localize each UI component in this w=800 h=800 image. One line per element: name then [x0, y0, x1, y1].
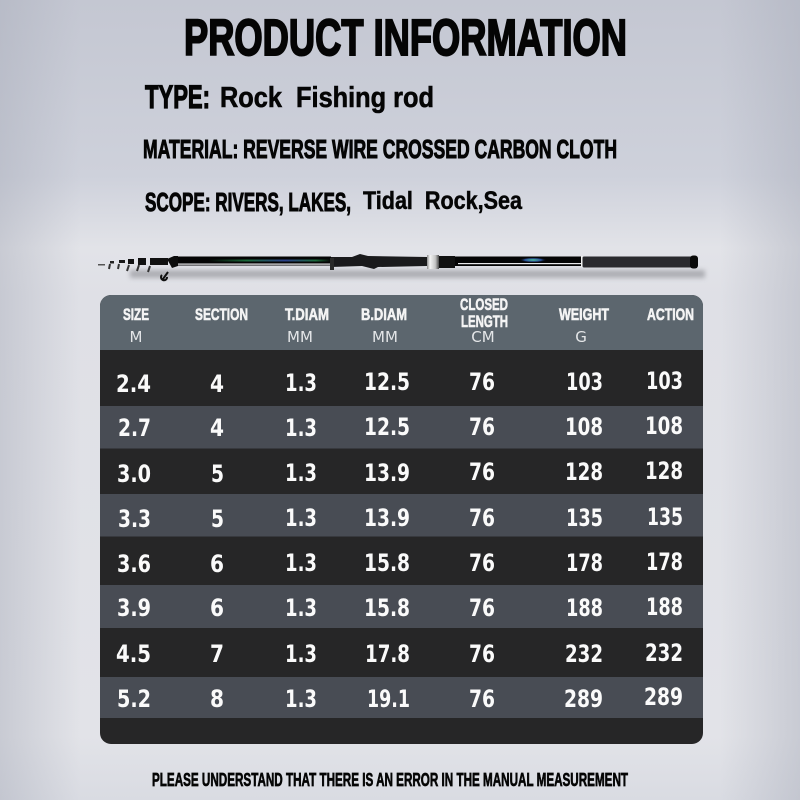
table header band [100, 295, 703, 350]
row 3.9: 76 [469, 594, 495, 622]
row 3.6 [117, 548, 683, 578]
row 2.4: 76 [469, 368, 495, 396]
row 3.3: 13.9 [364, 504, 410, 532]
column units: M [130, 328, 142, 346]
row 3.9: 188 [646, 593, 683, 621]
row 3.3: 5 [211, 505, 224, 533]
row 4.5: 7 [210, 640, 224, 668]
title: PRODUCT INFORMATION [184, 9, 627, 66]
table row bands [100, 406, 703, 718]
row 4.5: 17.8 [365, 640, 410, 668]
row 3.0: 76 [469, 458, 495, 486]
row 3.3 [118, 503, 683, 533]
row 3.0 [117, 457, 683, 488]
column units: MM [372, 328, 398, 346]
row 4.5: 232 [645, 639, 683, 667]
row 3.0: 128 [645, 457, 683, 485]
scope: Tidal Rock,Sea [363, 187, 523, 215]
column headings: T.DIAM [285, 305, 329, 324]
column headings: SECTION [195, 305, 248, 324]
row 3.6: 178 [646, 548, 683, 576]
scope: SCOPE: RIVERS, LAKES, [145, 187, 351, 217]
row 3.6: 178 [566, 549, 603, 577]
row 3.3: 135 [566, 504, 603, 532]
row 3.6: 6 [210, 550, 224, 578]
row 3.3: 76 [469, 504, 495, 532]
row 3.0: 128 [565, 458, 603, 486]
row 4.5 [116, 639, 683, 668]
row 2.4 [116, 367, 683, 398]
row 2.7: 4 [210, 414, 224, 442]
specification table panel [100, 295, 703, 744]
row 3.0: 5 [211, 460, 224, 488]
row 2.4: 2.4 [116, 370, 151, 398]
column headings: SIZE [123, 305, 149, 324]
row 5.2: 5.2 [117, 685, 151, 713]
column headings: LENGTH [461, 312, 508, 331]
column units: G [575, 328, 587, 346]
row 5.2: 289 [564, 685, 603, 713]
row 4.5: 4.5 [116, 640, 151, 668]
row 5.2: 76 [469, 685, 495, 713]
row 3.6: 1.3 [285, 549, 317, 577]
row 2.4: 12.5 [364, 368, 410, 396]
product type: TYPE: [145, 79, 210, 115]
row 3.6: 76 [469, 549, 495, 577]
row 3.3: 1.3 [285, 504, 317, 532]
row 2.7: 1.3 [285, 414, 317, 442]
column units: MM [287, 328, 313, 346]
row 3.9: 188 [566, 594, 603, 622]
column headings: B.DIAM [361, 305, 407, 324]
column units [130, 328, 587, 346]
row 2.4: 1.3 [285, 369, 317, 397]
row 2.7: 76 [469, 413, 495, 441]
product type [145, 79, 434, 115]
row 2.7: 108 [645, 412, 683, 440]
row 3.9 [117, 593, 683, 622]
row 3.9: 3.9 [117, 594, 151, 622]
row 4.5: 76 [469, 640, 495, 668]
row 5.2: 289 [644, 683, 683, 711]
column headings: ACTION [647, 305, 694, 324]
row 3.0: 1.3 [285, 459, 317, 487]
row 5.2: 1.3 [285, 685, 317, 713]
row 3.3: 3.3 [118, 505, 151, 533]
row 5.2: 8 [210, 685, 224, 713]
row 2.7 [118, 412, 683, 442]
row 3.6: 15.8 [364, 549, 410, 577]
row 3.6: 3.6 [117, 550, 151, 578]
row 3.0: 13.9 [364, 459, 410, 487]
row 3.9: 1.3 [285, 594, 317, 622]
column units: CM [471, 328, 495, 346]
row 2.7: 108 [565, 413, 603, 441]
row 2.4: 4 [210, 370, 224, 398]
row 3.9: 6 [210, 594, 224, 622]
column headings: CLOSED [460, 295, 508, 314]
row 5.2 [117, 683, 683, 713]
row 4.5: 1.3 [285, 640, 317, 668]
column headings [123, 295, 694, 331]
product type: Rock Fishing rod [220, 82, 434, 114]
row 3.3: 135 [647, 503, 683, 531]
row 2.4: 103 [566, 368, 603, 396]
row 2.7: 2.7 [118, 414, 151, 442]
row 3.0: 3.0 [117, 460, 151, 488]
row 2.4: 103 [646, 367, 683, 395]
row 2.7: 12.5 [364, 413, 410, 441]
row 5.2: 19.1 [367, 685, 410, 713]
column headings: WEIGHT [559, 305, 609, 324]
row 3.9: 15.8 [364, 594, 410, 622]
fishing rod image [98, 254, 705, 280]
row 4.5: 232 [565, 640, 603, 668]
